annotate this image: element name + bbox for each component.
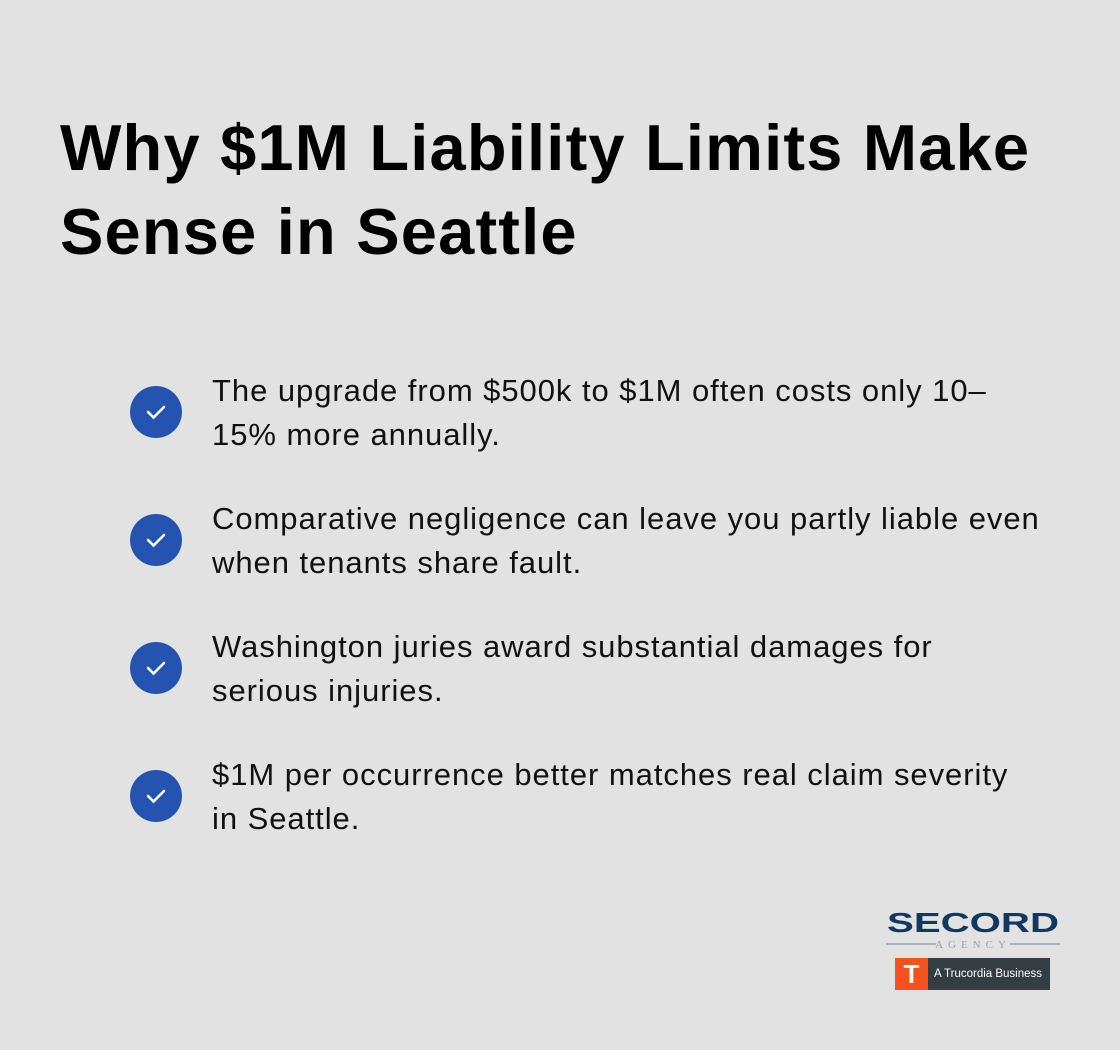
logo: trucordia badge: T (904, 959, 919, 989)
text 1: 15% more annually. (212, 417, 501, 452)
logo: trucordia badge: A Trucordia Business (934, 968, 1042, 980)
text 4: $1M per occurrence better matches real claim severity (212, 757, 1008, 792)
text 2: when tenants share fault. (212, 545, 582, 580)
title (60, 111, 1030, 268)
text 4 (212, 757, 1008, 836)
text 4: in Seattle. (212, 801, 360, 836)
logo (886, 907, 1060, 990)
text 2: Comparative negligence can leave you partly liable even (212, 501, 1040, 536)
logo: trucordia badge (895, 958, 1050, 990)
item 4 (130, 757, 1008, 836)
text 2 (212, 501, 1040, 580)
title: Why $1M Liability Limits Make (60, 111, 1030, 184)
logo: secord agency (886, 907, 1060, 951)
title: Sense in Seattle (60, 195, 578, 268)
item 1 (130, 373, 987, 452)
text 3 (212, 629, 933, 708)
icon: check 4 (130, 770, 182, 822)
item 3 (130, 629, 933, 708)
logo: secord agency: AGENCY (935, 939, 1011, 951)
icon: check 2 (130, 514, 182, 566)
text 1 (212, 373, 987, 452)
item 2 (130, 501, 1040, 580)
icon: check 1 (130, 386, 182, 438)
icon: check 3 (130, 642, 182, 694)
text 1: The upgrade from $500k to $1M often costs only 10– (212, 373, 987, 408)
text 3: Washington juries award substantial damages for (212, 629, 933, 664)
text 3: serious injuries. (212, 673, 444, 708)
logo: secord agency: SECORD (887, 907, 1059, 938)
